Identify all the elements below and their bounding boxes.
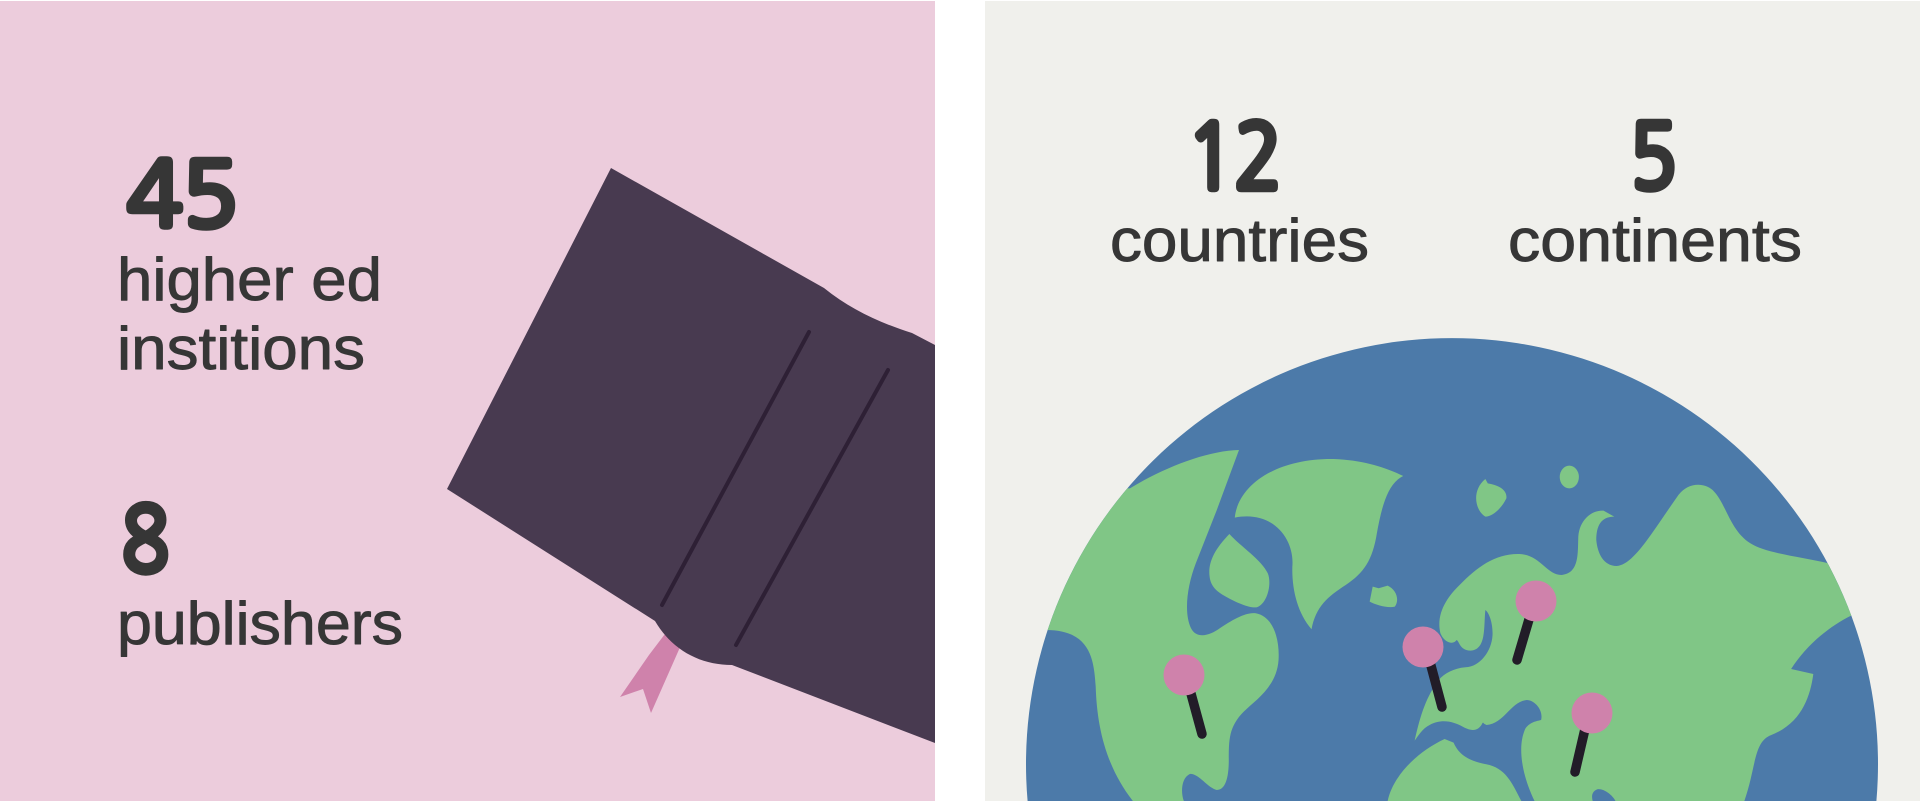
number: 12: 12 (1187, 113, 1282, 201)
label: continents: continents (1508, 207, 1802, 274)
globe land masses (1004, 450, 1891, 801)
map pin: centre (1402, 626, 1444, 707)
bookmark ribbon (620, 630, 681, 713)
stat: 8 publishers (117, 496, 403, 657)
label: publishers: publishers (117, 590, 403, 657)
number: 45: 45 (127, 151, 238, 239)
label: instiutions line: institions (117, 315, 365, 382)
panel: countries and continents (985, 1, 1920, 801)
icon: book with bookmark (447, 168, 935, 743)
stat: 12 countries (1110, 113, 1369, 274)
globe ocean (1026, 338, 1878, 801)
panel: institutions and publishers (0, 1, 935, 801)
book spine crease right (736, 370, 888, 645)
map pin: south east (1572, 692, 1612, 772)
chart: globe with map pins (1004, 338, 1891, 801)
number: 5: 5 (1630, 113, 1677, 201)
book spine crease left (662, 332, 809, 605)
book cover (447, 168, 935, 743)
stat: 45 higher ed institutions (117, 151, 382, 382)
map pin: north east (1516, 580, 1556, 660)
stat: 5 continents (1508, 113, 1802, 274)
label: countries: countries (1110, 207, 1369, 274)
map pin: west (1164, 654, 1204, 734)
label: higher ed: higher ed (117, 246, 382, 313)
number: 8: 8 (122, 496, 169, 584)
